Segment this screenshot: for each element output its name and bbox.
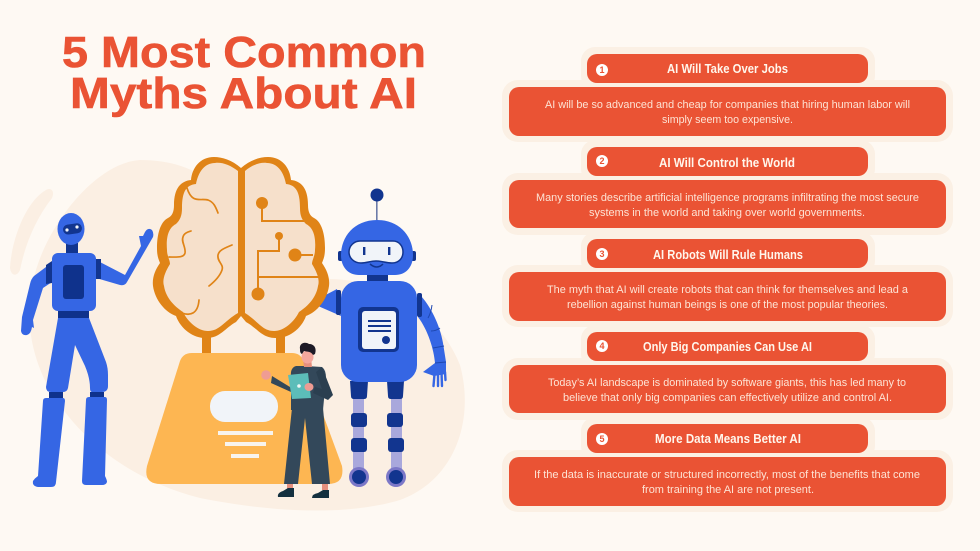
chest screen (358, 307, 399, 352)
myth 2 description (536, 192, 919, 219)
right arm (418, 295, 446, 363)
shoes (278, 488, 329, 498)
myth 3 heading: AI Robots Will Rule Humans (653, 248, 803, 262)
head (341, 220, 413, 275)
myth 5 description (534, 469, 920, 496)
myth 3 number badge: 3 (599, 249, 605, 259)
smile (370, 264, 383, 267)
neck (367, 275, 388, 281)
myth 2 body panel (509, 180, 946, 228)
thighs (350, 381, 404, 399)
wheels (349, 467, 406, 487)
myth 5 heading: More Data Means Better AI (655, 432, 801, 446)
myth 1 description (545, 99, 910, 126)
myth 3 description: rebellion against human beings is one of the most popular theories. (567, 299, 888, 311)
right robot far arm behind brain (316, 289, 341, 316)
myth 4 heading pill (587, 332, 868, 361)
myth 1 heading halo (581, 47, 875, 90)
title: Myths About AI (70, 69, 417, 118)
myth 3 description: The myth that AI will create robots that can think for themselves and lead a (547, 284, 909, 296)
myth 1 body halo (502, 80, 953, 142)
myth 5 heading halo (581, 417, 875, 460)
ankles (287, 482, 328, 490)
eyes (363, 247, 390, 255)
myth 5 description: from training the AI are not present. (642, 484, 814, 496)
myth 5 (502, 417, 953, 512)
myth 4 heading: Only Big Companies Can Use AI (643, 340, 812, 354)
right hand (423, 362, 446, 386)
pedestal (146, 353, 342, 484)
brain (153, 157, 329, 338)
title: 5 Most Common (62, 28, 426, 77)
myth 1 heading pill (587, 54, 868, 83)
myth 2 number badge: 2 (599, 156, 605, 166)
circuit traces (252, 197, 319, 300)
ears (338, 251, 416, 261)
left robot visor (62, 223, 83, 235)
myth 3 description (547, 284, 909, 311)
decorative crescent (10, 189, 53, 275)
myth 2 description: systems in the world and taking over world governments. (589, 207, 865, 219)
left robot head (58, 213, 84, 245)
myth 3 heading pill (587, 239, 868, 268)
myth 5 number badge (596, 433, 608, 445)
myth 2 number badge (596, 155, 608, 167)
pedestal lines (218, 431, 273, 458)
hand on tablet (304, 383, 314, 391)
leg joints (351, 413, 404, 452)
myth 2 heading: AI Will Control the World (659, 156, 795, 170)
myth 5 number badge: 5 (599, 434, 605, 444)
myth 5 body panel (509, 457, 946, 506)
background blob (29, 160, 465, 511)
brain stems (202, 332, 285, 355)
myth 1 number badge: 1 (599, 65, 605, 75)
far arm (313, 367, 333, 400)
title (62, 28, 426, 118)
right hemisphere (241, 157, 329, 338)
myth 5 description: If the data is inaccurate or structured incorrectly, most of the benefits that come (534, 469, 920, 481)
myth 1 heading: AI Will Take Over Jobs (667, 62, 788, 76)
myth 2 description: Many stories describe artificial intelligence programs infiltrating the most secure (536, 192, 919, 204)
myth 2 heading pill (587, 147, 868, 176)
left robot belt (58, 311, 89, 318)
left robot arms (21, 229, 153, 335)
myth 5 body halo (502, 450, 953, 512)
myth 1 body panel (509, 87, 946, 136)
myth 1 number badge (596, 64, 608, 76)
hair (300, 343, 316, 355)
myth 2 body halo (502, 173, 953, 235)
left robot hips and upper legs (46, 318, 108, 392)
myth 4 number badge: 4 (599, 341, 605, 351)
person with tablet (261, 343, 333, 498)
myth 4 number badge (596, 340, 608, 352)
left hemisphere (153, 157, 241, 338)
myth 4 heading halo (581, 325, 875, 368)
arm joint lines (428, 305, 446, 363)
myth 4 description: Today’s AI landscape is dominated by software giants, this has led many to (548, 377, 906, 389)
left robot knees (49, 392, 104, 398)
left robot (21, 213, 153, 487)
myth 2 (502, 140, 953, 235)
myth 4 body halo (502, 358, 953, 420)
jacket (271, 366, 326, 410)
left robot chest panel (63, 265, 84, 299)
myth 4 description: believe that only big companies can effectively utilize and control AI. (563, 392, 892, 404)
pedestal pill (210, 391, 278, 422)
brain creases (169, 188, 232, 314)
myth 3 number badge (596, 248, 608, 260)
myth 1 description: simply seem too expensive. (662, 114, 793, 126)
myth 4 description (548, 377, 906, 404)
myth 1 description: AI will be so advanced and cheap for companies that hiring human labor will (545, 99, 910, 111)
myth 4 (502, 325, 953, 420)
myth 3 (502, 232, 953, 327)
myth 5 heading pill (587, 424, 868, 453)
myth 3 heading halo (581, 232, 875, 275)
right robot (336, 188, 446, 487)
hand raised (261, 370, 271, 380)
left robot neck (66, 243, 78, 254)
tablet (288, 373, 311, 399)
left robot shoulders (46, 259, 101, 284)
trousers (284, 408, 330, 484)
antenna (370, 188, 384, 220)
neck and face (302, 350, 314, 367)
myth 3 body halo (502, 265, 953, 327)
leg rods (353, 398, 402, 470)
myth 2 heading halo (581, 140, 875, 183)
myth 4 body panel (509, 365, 946, 413)
myth 3 body panel (509, 272, 946, 321)
visor (349, 241, 403, 263)
shoulders (336, 290, 422, 317)
left robot lower legs (33, 397, 107, 487)
torso (341, 281, 417, 382)
myth 1 (502, 47, 953, 142)
left robot torso (52, 253, 96, 311)
